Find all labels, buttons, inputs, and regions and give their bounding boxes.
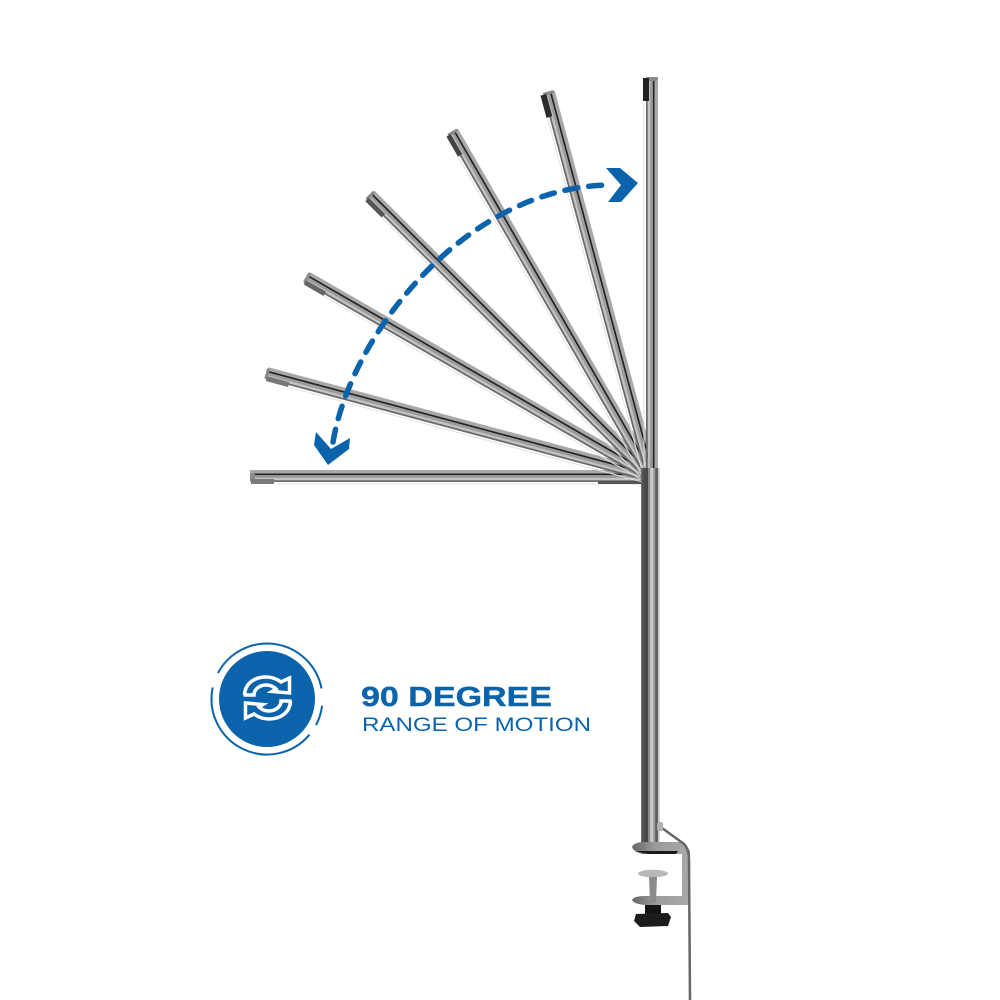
threaded screw [649,877,657,903]
clamp top plate [632,842,690,854]
dashed arc [333,185,612,442]
knob [645,905,661,915]
lamp arm: position 90 degrees [643,77,658,469]
lamp arm: position 75 degrees [540,90,656,471]
lamp arm: position 60 degrees [445,128,653,474]
heading: 90 degree: 90 DEGREE [361,681,552,712]
desk clamp with knob and cable [632,822,690,1000]
badge broken ring [218,644,322,688]
lamp arm: position 15 degrees [264,367,645,482]
pressure pad [638,870,668,877]
sync arrow: bottom [246,701,292,719]
clamp bottom plate [632,896,690,905]
sync arrow: top [244,677,290,695]
cable connector [657,822,663,831]
dashed motion arrow [314,168,638,465]
badge disc [219,651,315,747]
arrowhead: down-left [314,432,350,465]
subheading: range of motion: RANGE OF MOTION [362,715,591,736]
clamp spine [682,850,690,905]
lamp arm: position 30 degrees [302,271,648,479]
lamp pole [641,468,660,854]
lamp arm: position 0 degrees [250,470,643,484]
rotation badge icon [211,644,322,755]
power cable [662,828,690,1000]
arrowhead: right [606,168,638,202]
lamp arm: position 45 degrees [364,190,650,477]
